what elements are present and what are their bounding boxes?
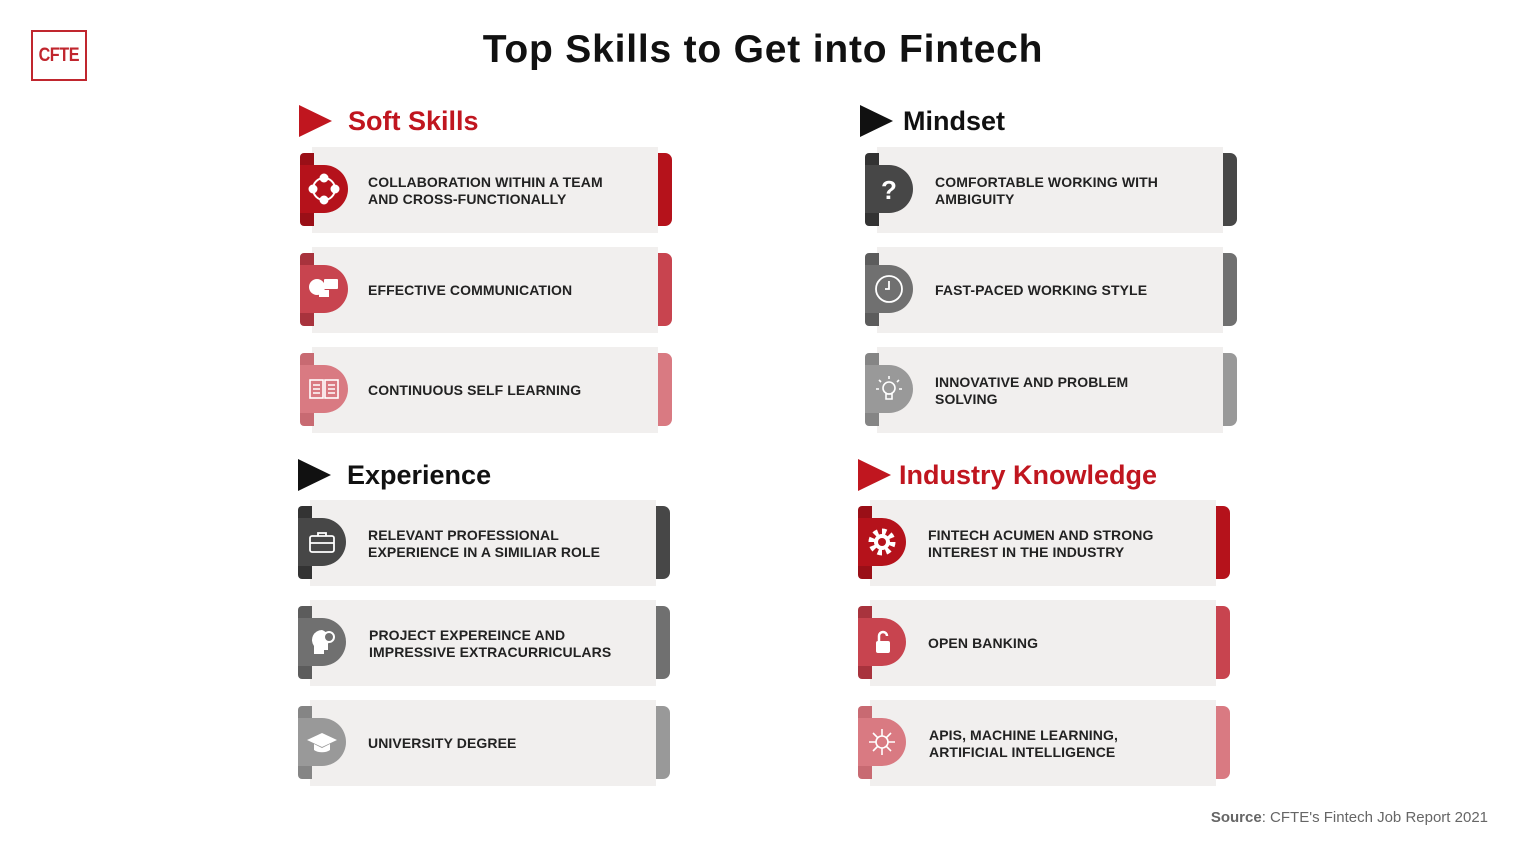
heading: soft skills: Soft Skills <box>348 106 479 136</box>
card: AI: ARTIFICIAL INTELLIGENCE <box>929 744 1115 760</box>
logo: CFTE <box>39 44 79 66</box>
heading: industry knowledge: Industry Knowledge <box>899 460 1157 490</box>
card: fast-paced <box>865 247 1237 333</box>
card: fintech acumen: FINTECH ACUMEN AND STRONG <box>928 526 1153 542</box>
card: ambiguity: AMBIGUITY <box>935 191 1014 207</box>
card: communication: EFFECTIVE COMMUNICATION <box>368 282 572 298</box>
card: professional experience: RELEVANT PROFESSIONAL <box>368 526 559 542</box>
card: fast-paced: FAST-PACED WORKING STYLE <box>935 282 1147 298</box>
card: innovative: INNOVATIVE AND PROBLEM <box>935 374 1128 390</box>
heading: mindset: Mindset <box>903 106 1005 136</box>
card: fintech acumen <box>858 500 1230 586</box>
card: open banking: OPEN BANKING <box>928 635 1038 651</box>
card: fintech acumen: INTEREST IN THE INDUSTRY <box>928 544 1124 560</box>
card: collaboration: COLLABORATION WITHIN A TEAM <box>368 174 603 190</box>
card: ambiguity: ? <box>881 175 897 205</box>
card: self learning <box>300 347 672 433</box>
card: collaboration <box>300 147 672 233</box>
card: degree <box>298 700 670 786</box>
card: open banking <box>858 600 1230 686</box>
card: projects <box>298 600 670 686</box>
card: collaboration: AND CROSS-FUNCTIONALLY <box>368 191 566 207</box>
card: projects: IMPRESSIVE EXTRACURRICULARS <box>369 644 611 660</box>
card: professional experience: EXPERIENCE IN A SIMILIAR ROLE <box>368 544 600 560</box>
logo <box>31 30 87 81</box>
card: projects: PROJECT EXPEREINCE AND <box>369 626 565 642</box>
card: innovative <box>865 347 1237 433</box>
heading: mindset <box>860 105 1005 137</box>
card: AI <box>858 700 1230 786</box>
heading: soft skills <box>299 105 479 137</box>
card: self learning: CONTINUOUS SELF LEARNING <box>368 382 581 398</box>
title: Top Skills to Get into Fintech <box>483 28 1043 71</box>
heading: experience: Experience <box>347 460 491 490</box>
source note: Source: CFTE's Fintech Job Report 2021 <box>1211 809 1488 826</box>
card: communication <box>300 247 672 333</box>
card: ambiguity: COMFORTABLE WORKING WITH <box>935 174 1158 190</box>
card: innovative: SOLVING <box>935 391 998 407</box>
card: AI: APIS, MACHINE LEARNING, <box>929 726 1118 742</box>
card: degree: UNIVERSITY DEGREE <box>368 735 516 751</box>
card: ambiguity <box>865 147 1237 233</box>
heading: experience <box>298 459 491 491</box>
card: professional experience <box>298 500 670 586</box>
